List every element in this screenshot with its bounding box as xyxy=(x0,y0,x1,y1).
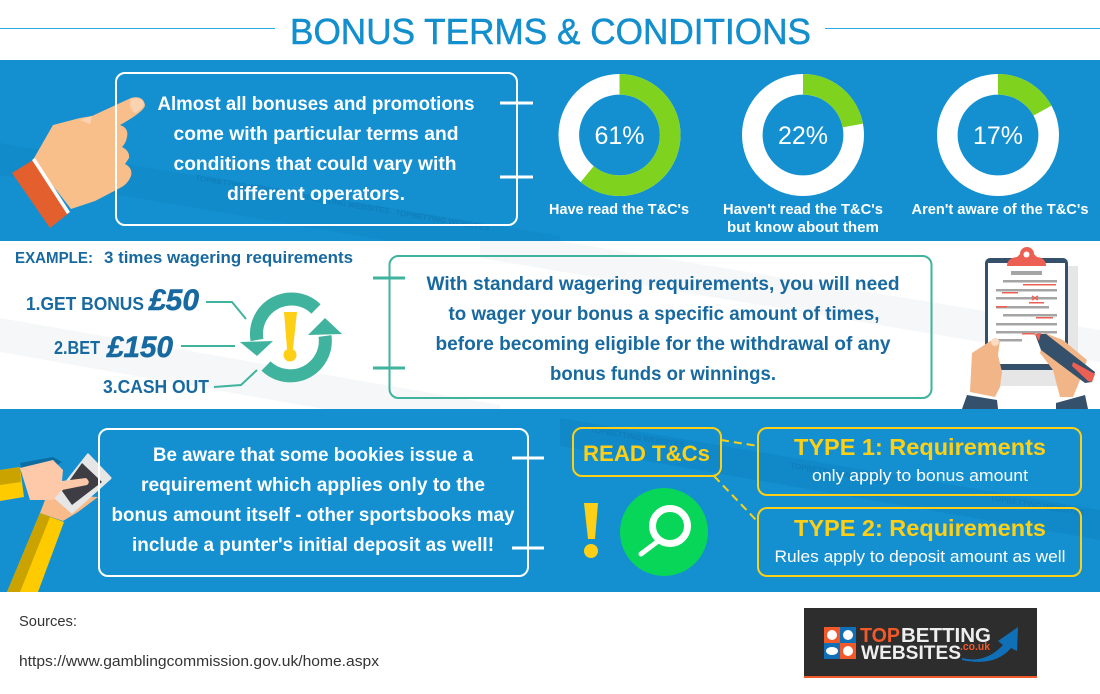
icon: clipboard with hands xyxy=(962,247,1095,409)
watermark bands xyxy=(0,143,1100,540)
panel: type 1 xyxy=(758,428,1081,495)
chart: 17% not aware: Aren't aware of the T&C's xyxy=(912,201,1088,218)
panel: middle white band xyxy=(0,241,1100,409)
icon: cycle arrows with exclamation xyxy=(240,299,342,376)
steps list xyxy=(26,284,257,397)
logo: TOP xyxy=(860,625,900,647)
panel: awareness callout: bonus amount itself - other sportsbooks may xyxy=(112,504,515,526)
logo: BETTING xyxy=(901,625,991,647)
callout: read T&Cs xyxy=(573,428,758,521)
panel: awareness callout: include a punter's initial deposit as well! xyxy=(132,534,494,556)
panel: top blue band xyxy=(0,60,1100,241)
title: BONUS TERMS & CONDITIONS xyxy=(290,11,811,52)
watermark bands: TOPBETTING WEBSITES xyxy=(790,461,886,486)
logo xyxy=(804,608,1037,678)
icon: yellow exclamation xyxy=(584,503,598,558)
steps list: 1.GET BONUS xyxy=(26,294,144,314)
steps list: £150 xyxy=(106,331,173,364)
panel: wagering explanation: With standard wagering requirements, you will need xyxy=(426,273,900,295)
logo: .co.uk xyxy=(960,641,991,653)
icon: hands holding phone xyxy=(0,455,110,592)
panel: type 2: TYPE 2: Requirements xyxy=(794,515,1046,541)
logo: WEBSITES xyxy=(861,643,961,664)
watermark bands: TOPBETTING WEBSITES xyxy=(590,425,686,450)
watermark bands: TOPBETTING WEBSITES xyxy=(195,173,291,198)
icon: magnifier in green circle xyxy=(620,488,708,576)
sources text xyxy=(19,613,380,670)
panel: type 1: TYPE 1: Requirements xyxy=(794,434,1046,460)
panel: wagering explanation xyxy=(373,256,932,398)
chart: 22% know about them: 22% xyxy=(778,122,828,150)
panel: intro callout: Almost all bonuses and promotions xyxy=(158,93,475,115)
panel: awareness callout xyxy=(99,429,544,576)
sources text: Sources: xyxy=(19,613,77,630)
heading: example: EXAMPLE: xyxy=(15,250,93,267)
chart: 22% know about them xyxy=(723,84,883,236)
steps list: 3.CASH OUT xyxy=(103,377,209,397)
panel: wagering explanation: to wager your bonus a specific amount of times, xyxy=(448,303,880,325)
panel: intro callout: conditions that could vary with xyxy=(174,153,456,175)
panel: wagering explanation: before becoming eligible for the withdrawal of any xyxy=(436,333,891,355)
panel: awareness callout: Be aware that some bookies issue a xyxy=(153,444,473,466)
panel: type 2 xyxy=(758,508,1081,576)
steps list: 2.BET xyxy=(54,338,100,358)
chart: 17% not aware: 17% xyxy=(973,122,1023,150)
panel: type 1: only apply to bonus amount xyxy=(812,466,1028,485)
chart: 61% have read: 61% xyxy=(594,122,645,150)
panel: intro callout: come with particular terms and xyxy=(174,123,458,145)
panel: type 2: Rules apply to deposit amount as well xyxy=(774,547,1066,566)
chart: 17% not aware xyxy=(912,84,1088,218)
heading: example: 3 times wagering requirements xyxy=(104,248,353,267)
icon: pointing hand xyxy=(12,97,145,228)
callout: read T&Cs: READ T&Cs xyxy=(583,441,710,466)
panel: bottom blue band xyxy=(0,409,1100,592)
watermark bands: TOPBETTING WEBSITES xyxy=(295,191,391,216)
panel: wagering explanation: bonus funds or winnings. xyxy=(550,363,776,385)
chart: 61% have read: Have read the T&C's xyxy=(549,201,689,218)
chart: 22% know about them: but know about them xyxy=(727,219,879,236)
watermark bands: TOPBETTING WEBSITES xyxy=(990,493,1086,518)
panel: intro callout: different operators. xyxy=(227,183,405,205)
panel: awareness callout: requirement which applies only to the xyxy=(141,474,485,496)
watermark bands: TOPBETTING WEBSITES xyxy=(395,208,491,233)
panel: intro callout xyxy=(116,73,533,225)
chart: 22% know about them: Haven't read the T&C's xyxy=(723,201,883,218)
steps list: £50 xyxy=(148,284,199,317)
sources text: https://www.gamblingcommission.gov.uk/home.aspx xyxy=(19,653,380,670)
chart: 61% have read xyxy=(549,84,689,218)
